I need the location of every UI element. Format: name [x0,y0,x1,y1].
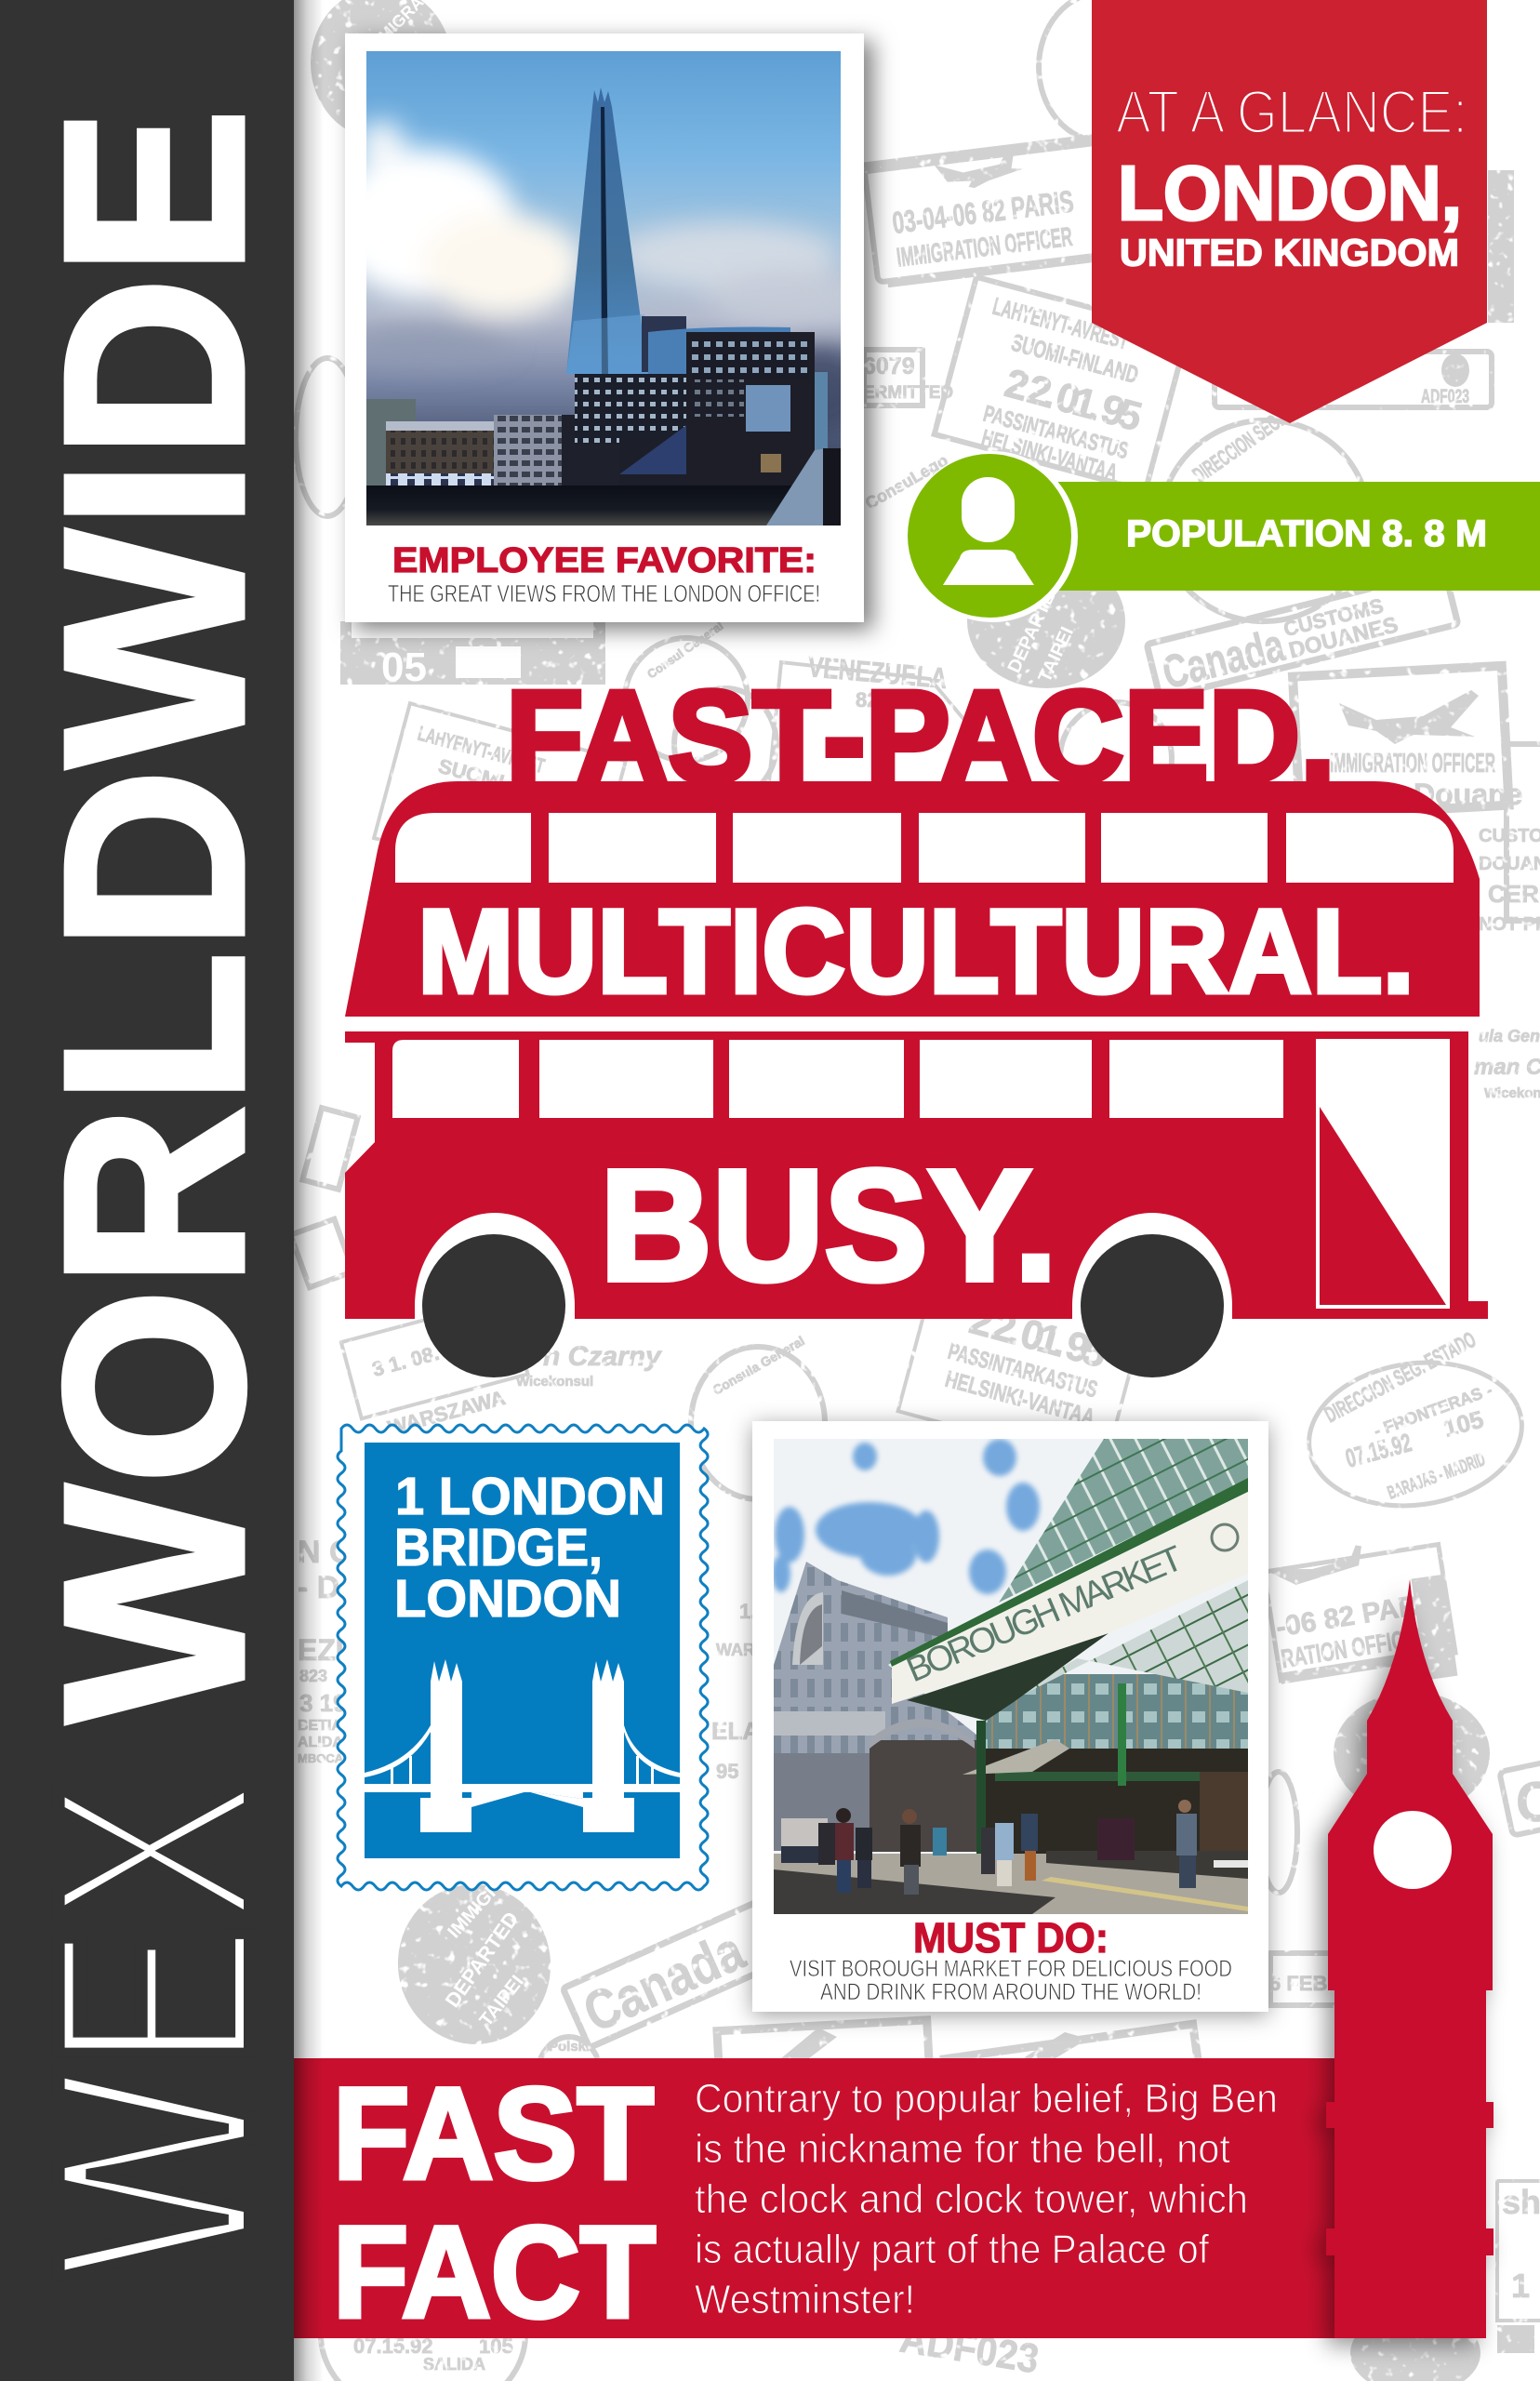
background: passport stamps: SUOMI-FINLAND [1008,328,1141,389]
stamp address text [394,1467,665,1629]
background: passport stamps: ConsuLego [862,451,951,512]
grey victorian building [774,1562,976,1753]
background: passport stamps: SUOMI-FINLAND [436,754,600,818]
text: busy: BUSY. [600,1137,1057,1314]
background: passport stamps: 07.15.92 [353,2334,433,2358]
background: passport stamps: -06 82 PARIS [1274,1586,1447,1643]
background: passport stamps: DEPARTED [1004,576,1065,676]
caption text: THE GREAT VIEWS FROM THE LONDON OFFICE! [388,579,820,607]
bus lower deck [345,1031,1488,1319]
background: passport stamps: Canada [1158,619,1290,698]
background: passport stamps: n Czarny [543,1341,662,1372]
background: passport stamps: 823 [299,1667,327,1685]
background: passport stamps: DEPARTED [441,1908,524,2012]
canopy roof [1025,1580,1248,1694]
background: passport stamps: MBOCAGI [298,1751,356,1765]
background: passport stamps: IMMIGRATION [444,1835,543,1942]
background: passport stamps: 95 [716,1760,738,1783]
icon: Big Ben tower [1326,1579,1494,2338]
background: passport stamps: 105 [1440,1405,1486,1443]
background: passport stamps: CUSTOMS [1281,593,1386,641]
sidebar title: WEX WORLDWIDE: WEX [0,1778,310,2278]
caption text: AND DRINK FROM AROUND THE WORLD! [820,1979,1201,2005]
stamp address text: 1 LONDON [395,1467,665,1526]
sidebar title: WEX WORLDWIDE: WORLDWIDE [11,108,298,1723]
background: passport stamps: Consula General [710,1333,807,1398]
background: passport stamps: - FRONTERAS - [1372,1380,1494,1441]
sidebar title: WEX WORLDWIDE [0,108,310,2278]
background: passport stamps: 03-04-06 82 PARIS [890,183,1076,240]
bus upper deck [345,781,1480,1017]
background: passport stamps: N OFF [298,1535,392,1570]
fast fact paragraph [695,2076,1278,2322]
market sign board: BOROUGH MARKET [901,1538,1188,1690]
caption heading: EMPLOYEE FAVORITE: [392,541,816,580]
bus door [1316,1039,1450,1309]
ground [774,1854,1248,1914]
fast fact title: FAST [333,2060,654,2206]
fast fact paragraph: is the nickname for the bell, not [695,2126,1230,2172]
background: passport stamps: 6079 [863,353,915,379]
wheels [422,1234,1224,1377]
background: passport stamps: 3 19 [299,1689,347,1717]
background: passport stamps: 3 1. 08. 93 [369,1334,469,1381]
banner: at a glance [1092,0,1487,423]
crowd of people [781,1800,1248,1895]
background: passport stamps: HELSINKI-VANTAA [978,425,1121,486]
wheel arches [415,1213,1232,1319]
background: passport stamps: PASSINTARKASTUS [945,1338,1100,1403]
stamp address text: BRIDGE, [394,1518,603,1577]
background: passport stamps: 2 2. 01. 95 [1000,360,1147,440]
stamp address text: LONDON [394,1569,621,1629]
background: passport stamps: Consul General [644,619,725,681]
double decker bus [345,781,1488,1377]
banner line: London: LONDON, [1118,150,1462,236]
polaroid: must do [752,1421,1268,2012]
background: passport stamps: DOUANES [1286,612,1401,663]
text: multicultural: MULTICULTURAL. [418,885,1414,1018]
market sign board [892,1492,1248,1704]
background: passport stamps: 6 FEB 06 [1269,1972,1356,1995]
sidebar shadow [294,0,324,2381]
background: passport stamps: IMMIGRATION OFFICER [895,222,1074,273]
background: passport stamps: - Dou [298,1570,378,1605]
background: passport stamps: VENEZUELA [806,650,949,695]
photo: The Shard skyline [366,51,841,525]
background: passport stamps: LAHYENYT-AVREST [416,722,548,778]
background: passport stamps: BETIA [298,1718,342,1734]
fast fact paragraph: Contrary to popular belief, Big Ben [695,2076,1278,2122]
background: passport stamps: TAIPEI [1035,624,1078,685]
fast fact paragraph: the clock and clock tower, which [695,2176,1248,2222]
background: passport stamps: WARSZAWA [385,1386,508,1440]
fast fact paragraph: Westminster! [695,2277,915,2322]
background: passport stamps: 823 [856,688,890,712]
background: passport stamps: SALIDA [423,2355,485,2374]
background: passport stamps: Polski [549,2039,590,2055]
green band [890,1478,1248,1667]
background: passport stamps: DIRECCION SEG. ESTADO [1188,377,1333,488]
background: passport stamps: LAHYENYT-AVREST [989,292,1132,355]
background: passport stamps: RATION OFFICER [1279,1622,1430,1673]
background: passport stamps: EZUE [298,1633,377,1667]
background: passport stamps: HELSINKI-VANTAA [942,1366,1097,1431]
banner line: United Kingdom: UNITED KINGDOM [1120,231,1459,273]
caption heading: MUST DO: [913,1914,1109,1962]
photo: Borough Market [772,1439,1248,1914]
polaroid: employee favorite [330,33,874,622]
background: passport stamps: 05 [381,645,427,690]
background: passport stamps: TAIPEI [476,1972,528,2030]
background: passport stamps: ELA [711,1717,760,1745]
shard tower [566,87,648,374]
icon: tower bridge [365,1659,680,1832]
glass roof [999,1439,1248,1603]
fast fact band [294,2058,1345,2345]
background: passport stamps: 105 [479,2334,513,2358]
background: passport stamps: ALIDA [298,1735,343,1750]
lower deck windows [392,1040,1283,1118]
fast fact title [333,2060,656,2345]
postage stamp: address [338,1425,708,1890]
background: passport stamps: Canada [575,1919,753,2044]
market interior [986,1674,1248,1749]
background: passport stamps: 1. 08. [739,1600,790,1623]
fast fact title: FACT [333,2199,656,2345]
population text: POPULATION 8. 8 M [1126,513,1487,554]
background: passport stamps: PASSINTARKASTUS [980,401,1131,464]
background: passport stamps: Wicekonsul [516,1374,593,1390]
background: passport stamps: Douane [1414,778,1522,811]
background: passport stamps: ADF023 [1421,386,1469,407]
banner line: at a glance: AT A GLANCE: [1116,77,1467,146]
background: passport stamps: ERMITTED [863,383,953,403]
icon: person in green circle [907,451,1078,622]
caption text [790,1956,1232,2005]
upper deck windows [395,813,1454,883]
bridge railing [766,448,828,525]
background: passport stamps: 2 2. 01. 95 [964,1297,1111,1377]
sidebar: dark vertical band [0,0,310,2381]
caption text: VISIT BOROUGH MARKET FOR DELICIOUS FOOD [790,1956,1232,1982]
population bar [907,451,1540,622]
fast fact paragraph: is actually part of the Palace of [695,2227,1210,2272]
heading: fast-paced: FAST-PACED. [506,663,1335,809]
background: passport stamps: 07.15.92 [1343,1428,1414,1473]
background: passport stamps: WARSZ [716,1641,777,1659]
